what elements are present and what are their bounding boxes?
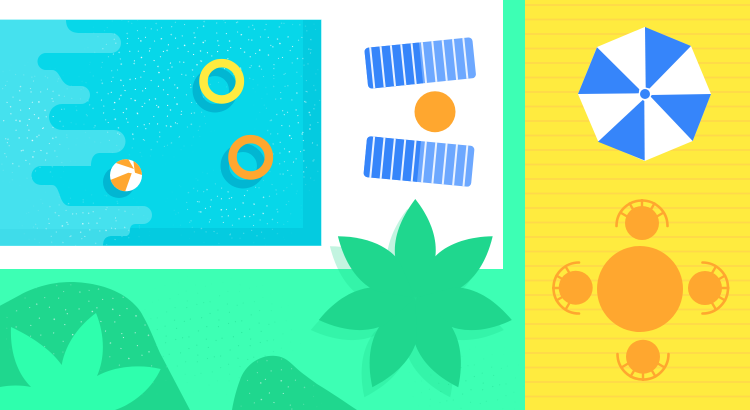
hill: left bush: [0, 282, 190, 410]
orange swim ring: [225, 139, 269, 184]
parasol hub: [640, 89, 650, 99]
side table between loungers: [414, 91, 456, 132]
yellow swim ring: [197, 63, 240, 108]
parasol white canopy: [578, 27, 711, 161]
sun lounger: bottom: [363, 136, 475, 187]
white pool deck: [0, 0, 503, 269]
chair: right: [688, 262, 730, 314]
bush speckles: [6, 284, 317, 410]
sun lounger: top: [364, 37, 476, 89]
shallow water waves: [0, 20, 152, 246]
pool water: [103, 20, 321, 246]
small palm: [0, 313, 161, 410]
large palm shadow: [306, 209, 508, 406]
deck plank lines: [525, 5, 750, 396]
yellow wood deck: [525, 0, 750, 410]
water sparkles: [0, 20, 322, 246]
pool edge: [0, 20, 322, 246]
icon: parasol: [578, 27, 711, 161]
chair: top: [616, 199, 668, 240]
panel: swimming pool: [0, 20, 322, 246]
ground speckles: [156, 296, 506, 404]
hill: middle bush: [232, 356, 357, 410]
beach ball: [103, 159, 142, 198]
pool inner deep water: [32, 20, 303, 228]
large palm: [314, 199, 516, 396]
shallow water lower band: [103, 232, 130, 244]
round table: [597, 246, 683, 332]
chair: left: [552, 262, 593, 314]
parasol blue panels: [578, 27, 711, 160]
chair: bottom: [618, 340, 668, 381]
table and four chairs: [552, 199, 730, 381]
